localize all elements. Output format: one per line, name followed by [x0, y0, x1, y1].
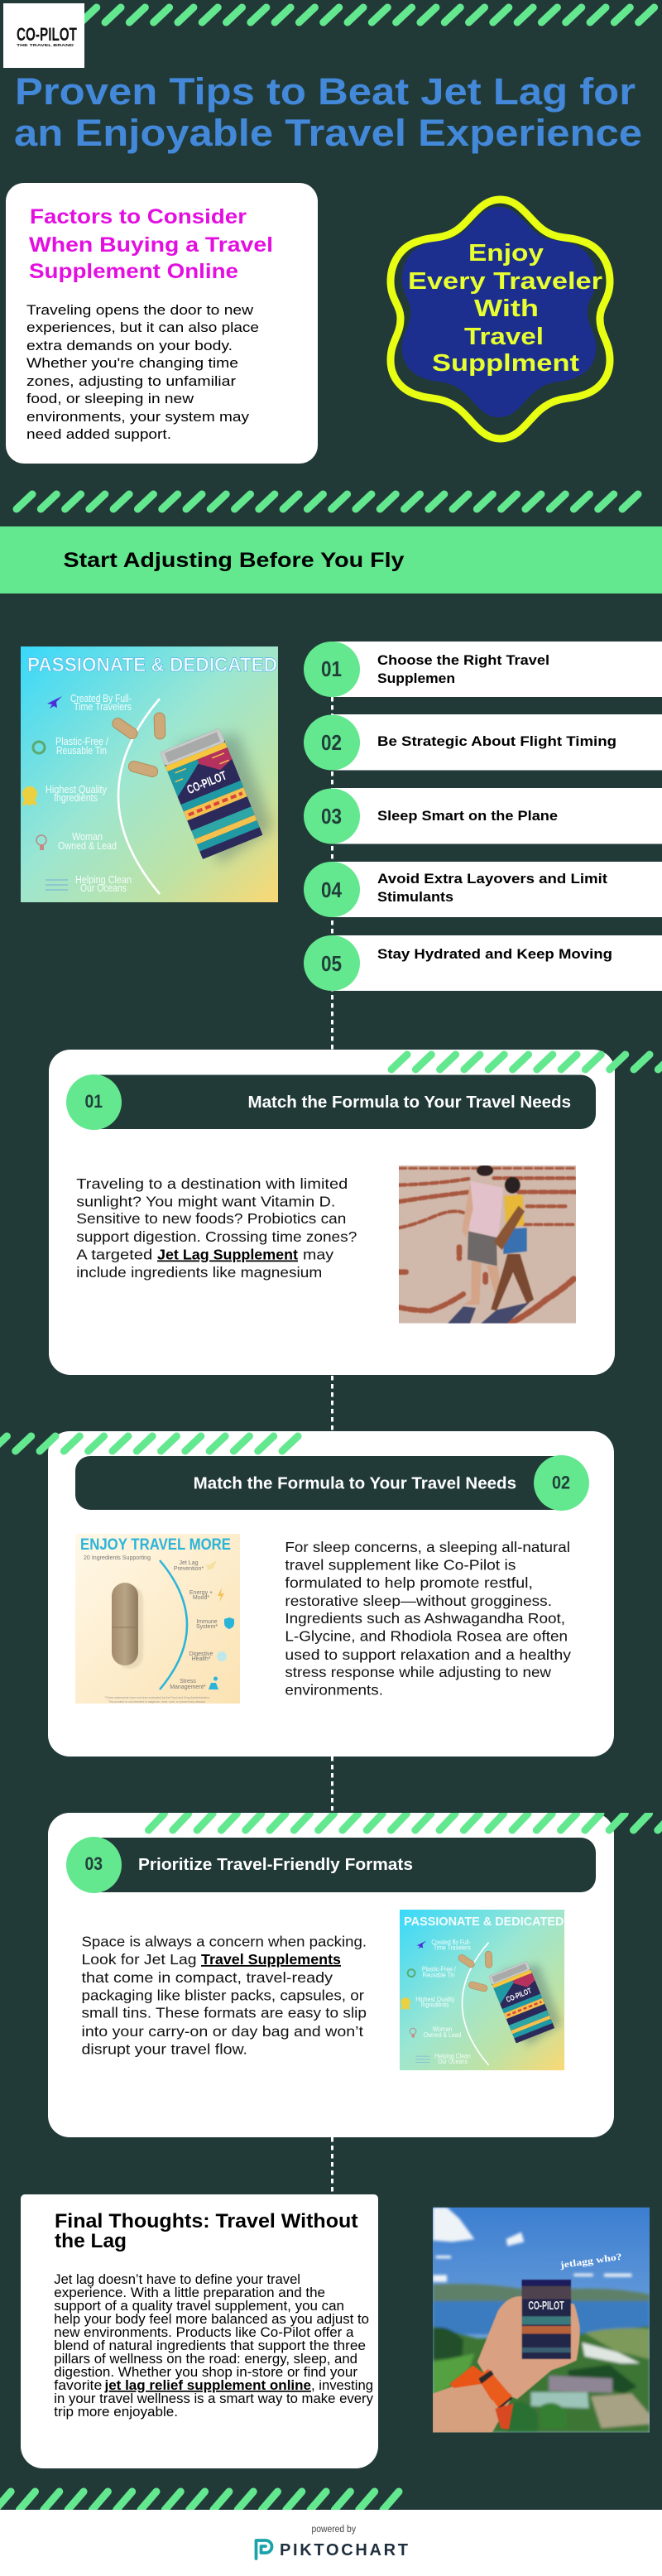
final thoughts text: Jet lag doesn’t have to define your travel [54, 2271, 300, 2287]
water [433, 2301, 650, 2334]
logo: Co-Pilot [3, 3, 84, 68]
ingredient labels [170, 1560, 218, 1690]
image: passionate and dedicated small: Reusable Tin [423, 1972, 455, 1979]
image title: ENJOY TRAVEL MORE [80, 1536, 231, 1554]
final thoughts text: jet lag relief supplement online [103, 2377, 311, 2393]
white arc [118, 699, 160, 894]
text block: intro: Traveling opens the door to new [26, 302, 254, 318]
arm [433, 2378, 511, 2433]
feature labels: Ingredients [54, 792, 98, 804]
final thoughts text: in your travel wellness is a smart way to make every [54, 2391, 373, 2406]
card 01 text: support digestion. Crossing time zones? [76, 1228, 357, 1245]
card 03 text: Travel Supplements [201, 1951, 341, 1968]
list row 1: Supplemen [377, 670, 455, 686]
bottom stripe band [0, 2492, 399, 2510]
card 02 text: travel supplement like Co-Pilot is [285, 1557, 516, 1574]
clouds [433, 2208, 631, 2282]
card 03 header: 03 [84, 1853, 103, 1874]
list row 4 [304, 862, 662, 917]
image: passionate and dedicated small: Highest Quality [415, 1996, 455, 2003]
watch strap [449, 2365, 511, 2407]
image: passionate and dedicated small [400, 1910, 564, 2070]
list row 3: 03 [321, 804, 342, 829]
ingredient labels: Management* [170, 1684, 206, 1690]
icon: plane [47, 696, 62, 709]
list row 5: Stay Hydrated and Keep Moving [377, 946, 612, 962]
image: enjoy travel more: 20 Ingredients Supporting [84, 1555, 151, 1561]
final thoughts text: digestion. Whether you shop in-store or find your [54, 2364, 357, 2380]
list row 3 [304, 788, 662, 844]
text block: intro: extra demands on your body. [26, 338, 233, 353]
ingredient labels: Prevention* [174, 1566, 204, 1572]
logo: Co-Pilot: CO-PILOT [17, 24, 77, 45]
image: enjoy travel more [75, 1534, 240, 1704]
final thoughts text: new environments. Products like Co-Pilot offer a [54, 2324, 354, 2340]
fine print [104, 1696, 210, 1704]
ingredient labels: System* [196, 1624, 218, 1630]
badge yellow outline [391, 199, 610, 439]
panel: final thoughts [21, 2194, 378, 2468]
card 03 text [81, 1934, 367, 2058]
final thoughts text [54, 2271, 373, 2420]
image: passionate and dedicated small: Plastic-Free / [422, 1966, 457, 1973]
feature labels [46, 693, 132, 894]
title: an Enjoyable Travel Experience [14, 112, 642, 154]
image: passionate and dedicated small: PASSIONATE & DEDICATED [404, 1915, 564, 1929]
image: passionate and dedicated [21, 646, 278, 902]
ingredient labels: Mood* [193, 1595, 209, 1601]
panel: card 01 [49, 1050, 662, 1375]
list row 5: 05 [321, 951, 342, 976]
panel: card 02 [0, 1431, 614, 1757]
card 01 text: sunlight? You might want Vitamin D. [76, 1194, 335, 1210]
feature labels: Reusable Tin [56, 745, 107, 757]
card 03 text: disrupt your travel flow. [81, 2041, 247, 2058]
text block: intro [26, 302, 259, 442]
jetlagg who caption: jetlagg who? [559, 2252, 622, 2271]
fine print: This product is not intended to diagnose, treat, cure, or prevent any disease. [108, 1700, 206, 1704]
card 02 text: environments. [285, 1682, 383, 1699]
text block: intro: experiences, but it can also place [26, 320, 259, 335]
icon: piktochart mark [257, 2540, 272, 2559]
list row 4: Avoid Extra Layovers and Limit [377, 871, 607, 887]
card 02 text: For sleep concerns, a sleeping all-natural [285, 1539, 570, 1555]
final thoughts text: pillars of wellness on the road: energy, sleep, and [54, 2351, 357, 2367]
card 01 text: Traveling to a destination with limited [76, 1175, 348, 1192]
fine print: *These statements have not been evaluated by the Food and Drug Administration. [104, 1696, 210, 1699]
badge text: Travel [464, 324, 544, 350]
tin label: CO-PILOT [185, 769, 228, 797]
feature labels: Helping Clean [75, 874, 132, 886]
card 02 text: used to support relaxation and a healthy [285, 1646, 571, 1663]
card 01 text: A targeted [76, 1247, 152, 1263]
heading: factors [29, 205, 273, 283]
card 03 text: packaging like blister packs, capsules, or [81, 1987, 364, 2004]
feature labels: Time Travelers [74, 701, 132, 713]
feature labels: Woman [72, 831, 103, 843]
list row 4: 04 [321, 877, 342, 902]
logo: Co-Pilot: THE TRAVEL BRAND [17, 43, 74, 47]
footer [0, 2510, 662, 2576]
heading: factors: When Buying a Travel [29, 233, 273, 257]
text block: intro: environments, your system may [26, 409, 250, 425]
list row 1: 01 [321, 656, 342, 681]
supplement box [522, 2280, 571, 2359]
final thoughts text: support of a quality travel supplement, you can [54, 2298, 344, 2314]
panel: factors to consider [6, 183, 318, 464]
image: passionate and dedicated small: CO-PILOT [505, 1987, 533, 2005]
supplement tin [160, 728, 262, 859]
badge: enjoy every traveler [391, 199, 610, 439]
card 03 header: Prioritize Travel-Friendly Formats [138, 1856, 413, 1874]
card 01 header [66, 1074, 596, 1130]
banner: start adjusting [0, 526, 662, 594]
card 01 text: may [303, 1247, 333, 1263]
icon: ribbon [22, 786, 37, 806]
card 01 text: Jet Lag Supplement [157, 1247, 298, 1263]
badge text [408, 240, 602, 377]
list row 2: 02 [321, 730, 342, 755]
card 02 text: stress response while adjusting to new [285, 1664, 551, 1680]
final thoughts heading [55, 2210, 358, 2252]
image: passionate and dedicated small: Owned & Lead [424, 2031, 461, 2039]
title [14, 70, 642, 154]
final thoughts text: blend of natural ingredients that support the three [54, 2338, 366, 2353]
list row 5 [304, 935, 662, 991]
list row 1 [304, 642, 662, 697]
hand and fingers [477, 2296, 580, 2399]
card 02 header: 02 [552, 1473, 570, 1493]
capsule [112, 1583, 143, 1669]
second stripe band [17, 494, 638, 509]
final thoughts text: help your body feel more balanced as you adjust to [54, 2311, 369, 2327]
card 01 text: Sensitive to new foods? Probiotics can [76, 1210, 346, 1227]
icon: bulb [36, 835, 46, 850]
card 02 stripes [0, 1436, 298, 1451]
final thoughts text: favorite [54, 2377, 102, 2393]
ingredient labels: Digestive [189, 1651, 213, 1657]
text block: intro: need added support. [26, 426, 171, 442]
image: passionate and dedicated small: Our Oceans [438, 2058, 468, 2065]
land [433, 2326, 650, 2433]
feature labels: Highest Quality [46, 784, 108, 795]
final thoughts text: trip more enjoyable. [54, 2404, 178, 2420]
feature labels: Created By Full- [70, 693, 132, 704]
final thoughts text: experience. With a little preparation and the [54, 2285, 325, 2300]
list row 4: Stimulants [377, 889, 453, 905]
list row 2 [304, 714, 662, 770]
card 02 text: Ingredients such as Ashwagandha Root, [285, 1610, 565, 1627]
badge text: With [474, 296, 539, 322]
card 02 text: L-Glycine, and Rhodiola Rosea are often [285, 1628, 568, 1645]
piktochart wordmark: PIKTOCHART [280, 2541, 408, 2559]
panel: card 03 [48, 1813, 662, 2137]
text block: intro: Whether you're changing time [26, 355, 238, 371]
tin shadow [178, 733, 273, 863]
badge text: Enjoy [468, 240, 544, 267]
card 03 stripes [149, 1814, 662, 1830]
powered by: powered by [311, 2525, 356, 2535]
image: passionate and dedicated small: Woman [433, 2026, 452, 2033]
card 02 header: Match the Formula to Your Travel Needs [194, 1475, 516, 1493]
photo: couple on rock labyrinth [399, 1165, 576, 1324]
card 03 text: into your carry-on or day bag and won’t [81, 2023, 363, 2040]
card 03 text: that come in compact, travel-ready [81, 1969, 333, 1986]
card 03 header [66, 1837, 596, 1893]
title: Proven Tips to Beat Jet Lag for [15, 70, 636, 113]
list row 2: Be Strategic About Flight Timing [377, 733, 616, 749]
image: passionate and dedicated small: Time Travelers [434, 1944, 471, 1951]
box label: CO-PILOT [528, 2300, 564, 2313]
ingredient labels: Stress [180, 1679, 196, 1684]
heading: factors: Supplement Online [29, 260, 238, 283]
card 01 text: include ingredients like magnesium [76, 1264, 322, 1281]
blue arc [160, 1560, 187, 1689]
ingredient labels: Jet Lag [180, 1560, 199, 1566]
text block: intro: zones, adjusting to unfamiliar [26, 373, 236, 389]
image: passionate and dedicated small: Created By Full- [431, 1939, 471, 1946]
final thoughts heading: Final Thoughts: Travel Without [55, 2210, 358, 2232]
list row 3: Sleep Smart on the Plane [377, 808, 558, 824]
ingredient labels: Immune [196, 1619, 218, 1625]
list row 1: Choose the Right Travel [377, 652, 549, 668]
banner: start adjusting: Start Adjusting Before You Fly [63, 549, 405, 572]
card 02 text: restorative sleep—without grogginess. [285, 1593, 552, 1609]
card 02 text: formulated to help promote restful, [285, 1574, 533, 1591]
card 01 stripes [391, 1055, 662, 1069]
card 01 header: 01 [84, 1091, 103, 1112]
text block: intro: food, or sleeping in new [26, 391, 194, 406]
top stripe band [81, 7, 655, 22]
icon: waves [46, 880, 68, 890]
final thoughts heading: the Lag [55, 2230, 127, 2252]
hills [433, 2284, 650, 2303]
ingredient icons [205, 1560, 234, 1689]
dashed connector line [331, 697, 333, 2195]
photo: hand holding tin over bay [433, 2208, 650, 2433]
icon: recycle ring [33, 742, 45, 753]
image title: PASSIONATE & DEDICATED [27, 654, 277, 676]
badge text: Supplment [432, 350, 579, 377]
card 03 text: small tins. These formats are easy to slip [81, 2005, 367, 2021]
ingredient labels: Energy + [189, 1590, 213, 1596]
final thoughts text: , investing [311, 2377, 373, 2393]
pills [110, 713, 166, 778]
feature labels: Owned & Lead [58, 840, 117, 852]
image: passionate and dedicated small: Helping Clean [434, 2053, 471, 2060]
badge text: Every Traveler [408, 268, 602, 295]
card 01 header: Match the Formula to Your Travel Needs [248, 1093, 571, 1112]
buildings [549, 2376, 612, 2393]
feature labels: Plastic-Free / [55, 736, 108, 747]
card 03 text: Look for Jet Lag [81, 1951, 197, 1968]
badge blue fill [402, 207, 596, 417]
image: passionate and dedicated small: Ingredients [421, 2002, 449, 2008]
card 02 text [285, 1539, 571, 1699]
feature labels: Our Oceans [80, 882, 127, 894]
card 03 text: Space is always a concern when packing. [81, 1934, 367, 1950]
card 02 header [75, 1455, 589, 1511]
heading: factors: Factors to Consider [30, 205, 247, 228]
ingredient labels: Health* [192, 1656, 211, 1662]
card 01 text [76, 1175, 357, 1281]
